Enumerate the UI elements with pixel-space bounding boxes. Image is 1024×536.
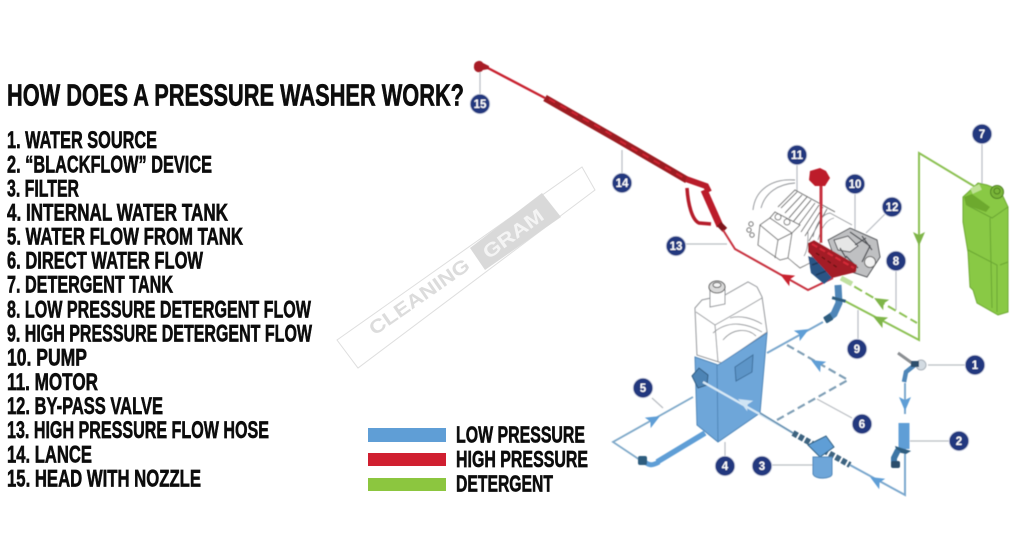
legend: HIGH PRESSURE (456, 446, 588, 472)
low pressure flows: blue (613, 322, 911, 495)
backflow device (891, 423, 911, 468)
number badges: 13 (670, 241, 682, 253)
number badges: 7 (979, 129, 985, 141)
number badges: 4 (722, 461, 729, 473)
numbered parts list: 5. WATER FLOW FROM TANK (7, 224, 243, 250)
water source tap (898, 353, 926, 382)
numbered parts list: 10. PUMP (7, 344, 87, 372)
pump (828, 228, 880, 277)
number badges: 15 (474, 99, 487, 111)
legend: DETERGENT (456, 470, 553, 496)
detergent flows: green (841, 153, 977, 340)
legend: LOW PRESSURE (456, 422, 585, 448)
by-pass valve and manifold (808, 168, 857, 284)
lance and hose: high pressure (474, 61, 725, 230)
number badges: 5 (640, 383, 647, 395)
number badges (470, 94, 992, 476)
number badges: 9 (854, 344, 860, 356)
numbered parts list (7, 127, 312, 492)
high pressure flow hose (723, 230, 833, 290)
pressure washer diagram (470, 61, 1008, 495)
number badges: 2 (956, 436, 962, 448)
numbered parts list: 6. DIRECT WATER FLOW (7, 248, 203, 274)
number badges: 1 (972, 360, 979, 372)
filter (793, 433, 850, 478)
number badges: 10 (849, 179, 861, 191)
watermark: GRAM (479, 205, 548, 264)
numbered parts list: 13. HIGH PRESSURE FLOW HOSE (7, 417, 269, 444)
pump inlet elbow (823, 285, 846, 323)
numbered parts list: 11. MOTOR (7, 369, 98, 396)
legend (368, 422, 588, 496)
number badges: 11 (791, 150, 804, 162)
number badges: 8 (893, 256, 900, 268)
number badges: 3 (759, 461, 765, 473)
number badges: 14 (616, 178, 629, 190)
title: HOW DOES A PRESSURE WASHER WORK? (7, 78, 464, 112)
numbered parts list: 2. “BLACKFLOW” DEVICE (7, 152, 212, 178)
water tank (692, 281, 767, 442)
numbered parts list: 12. BY-PASS VALVE (7, 393, 163, 420)
numbered parts list: 1. WATER SOURCE (7, 127, 157, 154)
numbered parts list: 8. LOW PRESSURE DETERGENT FLOW (7, 296, 311, 324)
watermark: CLEANING (365, 255, 474, 340)
number badges: 12 (886, 202, 898, 214)
numbered parts list: 14. LANCE (7, 442, 92, 468)
number badges: 6 (859, 419, 865, 431)
leader lines (480, 72, 982, 465)
watermark (337, 167, 595, 368)
detergent tank (963, 183, 1008, 315)
numbered parts list: 4. INTERNAL WATER TANK (7, 200, 228, 226)
numbered parts list: 3. FILTER (7, 176, 79, 202)
numbered parts list: 7. DETERGENT TANK (7, 272, 173, 298)
motor (747, 180, 852, 270)
numbered parts list: 15. HEAD WITH NOZZLE (7, 466, 201, 492)
numbered parts list: 9. HIGH PRESSURE DETERGENT FLOW (7, 320, 312, 348)
